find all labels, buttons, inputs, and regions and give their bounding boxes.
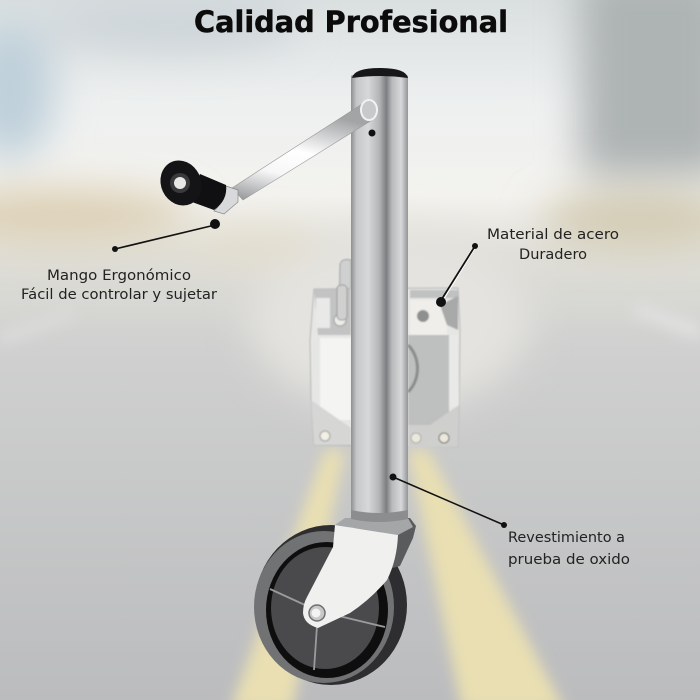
mounting plate bracket — [310, 260, 460, 447]
callout: revestimiento — [390, 474, 630, 568]
callout: mango ergonomico: Fácil de controlar y sujetar — [21, 287, 217, 303]
title: Calidad Profesional — [194, 5, 508, 39]
callout: material de acero: Duradero — [519, 247, 587, 263]
callout: mango ergonomico: Mango Ergonómico — [47, 268, 191, 284]
callout: revestimiento: Revestimiento a — [508, 530, 625, 546]
wheel — [254, 525, 407, 685]
steel tube — [351, 68, 408, 522]
crank handle — [153, 100, 377, 214]
wheel fork — [303, 518, 416, 628]
callout: material de acero — [436, 227, 619, 307]
callout: mango ergonomico — [21, 219, 220, 303]
callout: revestimiento: prueba de oxido — [508, 552, 630, 568]
callout: material de acero: Material de acero — [487, 227, 619, 243]
